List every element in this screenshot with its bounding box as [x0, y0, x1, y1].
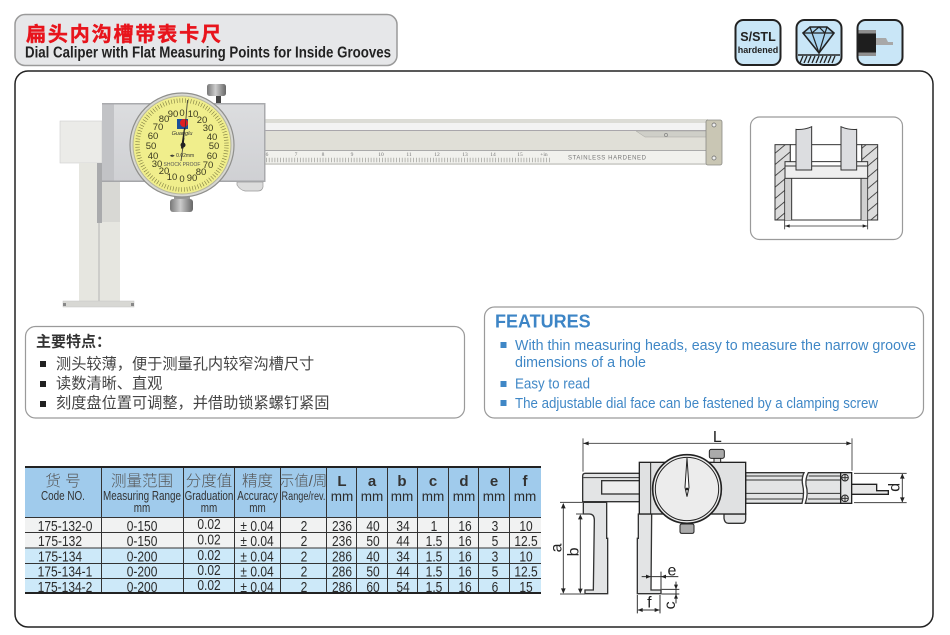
dial: 10	[188, 109, 198, 120]
table rows: ± 0.04	[240, 518, 274, 534]
scale: 14	[490, 152, 496, 158]
table header: Range/rev.	[282, 490, 325, 503]
table rows: 175-134-1	[38, 563, 92, 580]
dimension: e	[642, 563, 678, 590]
table rows: 0.02	[197, 516, 221, 532]
dial: 40	[148, 151, 158, 162]
dial	[130, 93, 234, 197]
table rows: ± 0.04	[240, 533, 274, 549]
dimension: a	[549, 502, 585, 594]
dial: 80	[159, 114, 169, 125]
table header: Measuring Range	[103, 490, 181, 503]
scale: 11	[406, 152, 412, 158]
table header: mm	[249, 502, 266, 515]
dial: SHOCK PROOF	[164, 162, 200, 168]
table rows: 0.02	[197, 531, 221, 548]
drawing: slider head	[639, 462, 746, 514]
title panel: 扁头内沟槽带表卡尺	[26, 23, 221, 46]
dial: 30	[203, 123, 213, 134]
table rows: 1.5	[426, 579, 442, 595]
dimension: f: f	[647, 595, 652, 612]
table header: mm	[391, 489, 413, 504]
table header: Accuracy	[237, 490, 278, 503]
beam	[264, 119, 708, 165]
jaw leg	[63, 163, 134, 307]
dial: 90	[187, 173, 197, 184]
dimension: e: e	[668, 563, 677, 580]
dimension: L	[583, 429, 847, 472]
photo: dial caliper	[60, 84, 722, 307]
table header: f	[522, 473, 528, 490]
title panel: Dial Caliper with Flat Measuring Points for Inside Grooves	[25, 44, 391, 62]
dial: 10	[167, 172, 177, 183]
dial: 60	[148, 131, 158, 142]
table rows: 10	[519, 518, 533, 534]
drawing: beam left	[583, 473, 640, 502]
scale: 13	[462, 152, 468, 158]
table rows: 236	[332, 518, 352, 534]
table rows: 286	[332, 579, 352, 595]
fixed jaw block	[60, 121, 102, 163]
panel: Chinese features: 刻度盘位置可调整，并借助锁紧螺钉紧固	[56, 394, 329, 412]
scale: 6	[266, 152, 269, 158]
table rows: 0-200	[127, 548, 158, 565]
panel: English features: The adjustable dial face can be fastened by a clamping screw	[515, 395, 878, 412]
table rows: 16	[458, 563, 472, 580]
table header: mm	[422, 489, 444, 504]
table rows: 60	[366, 579, 380, 595]
scale: 7	[295, 152, 298, 158]
icon: stainless steel hardened: S/STL	[740, 30, 776, 44]
panel: Chinese features: 测头较薄，便于测量孔内较窄沟槽尺寸	[56, 355, 314, 373]
title panel	[15, 14, 397, 66]
table rows: 3	[492, 548, 498, 565]
table rows: 1	[431, 518, 437, 534]
table header: mm	[453, 489, 475, 504]
drawing: left jaw	[583, 502, 608, 594]
table rows: 0-200	[127, 563, 158, 580]
table rows: 44	[396, 563, 410, 580]
icon: diamond hardness	[796, 20, 842, 65]
dial: 80	[196, 167, 206, 178]
table rows: 12.5	[514, 533, 538, 549]
dial: 30	[152, 159, 162, 170]
table header: mm	[483, 489, 505, 504]
scale: STAINLESS HARDENED	[568, 156, 647, 162]
dial: 50	[146, 141, 156, 152]
table header: Graduation	[185, 490, 233, 503]
scale: +in	[540, 152, 548, 158]
drawing: dial	[653, 455, 721, 523]
panel: Chinese features	[26, 326, 464, 418]
dial: Guanglu	[172, 131, 192, 137]
dial: 70	[203, 160, 213, 171]
table rows: 0-150	[127, 533, 158, 549]
table rows: 40	[366, 548, 380, 565]
table rows: 3	[492, 518, 498, 534]
table rows: 1.5	[426, 533, 442, 549]
table rows: 2	[301, 563, 307, 580]
table: specifications	[25, 466, 541, 595]
table rows: 40	[366, 518, 380, 534]
table rows: 175-134-2	[38, 579, 92, 595]
table rows: 6	[492, 579, 498, 595]
table rows: 50	[366, 533, 380, 549]
table header: Code NO.	[41, 490, 85, 503]
table rows: 2	[301, 548, 307, 565]
dimension: f	[637, 595, 660, 613]
table rows: 16	[458, 518, 472, 534]
table rows	[38, 516, 538, 595]
beam end block	[706, 120, 722, 165]
top clamp knob	[207, 84, 226, 103]
table header: 分度值	[186, 472, 232, 490]
table rows: 12.5	[514, 563, 538, 580]
table header: mm	[331, 489, 353, 504]
table header: d	[459, 473, 469, 490]
table header: 示值/周	[280, 472, 327, 490]
table rows: 15	[519, 579, 533, 595]
table header: a	[368, 473, 377, 490]
table rows: 16	[458, 579, 472, 595]
table header: mm	[134, 502, 150, 515]
drawing: right jaw	[637, 514, 661, 594]
table header: c	[429, 473, 437, 490]
table rows: 2	[301, 518, 307, 534]
bottom knob	[170, 196, 193, 212]
drawing: tab	[724, 514, 746, 523]
table rows: 0.02	[197, 577, 221, 593]
table header	[41, 472, 536, 515]
panel: Chinese features: 读数清晰、直观	[56, 376, 162, 392]
table rows: 0.02	[197, 562, 221, 578]
inset: groove measuring illustration	[750, 117, 902, 240]
table rows: 50	[366, 563, 380, 580]
panel: English features	[484, 307, 924, 418]
table rows: ± 0.04	[240, 548, 274, 565]
dial: 0	[179, 174, 185, 185]
table rows: 34	[396, 518, 410, 534]
table rows: 286	[332, 563, 352, 580]
table rows: 175-132-0	[38, 518, 93, 534]
slider tab	[237, 182, 263, 191]
dial: 40	[207, 132, 217, 143]
dial: 20	[197, 115, 207, 126]
drawing: knobs	[680, 449, 724, 533]
table rows: 175-134	[38, 548, 82, 565]
dial: 50	[209, 141, 219, 152]
table header: b	[397, 473, 407, 490]
panel: Chinese features: 主要特点：	[36, 332, 111, 350]
icon: flat measuring point	[858, 20, 902, 65]
technical drawing with dimensions	[549, 429, 907, 613]
table rows: 16	[458, 533, 472, 549]
table header: mm	[201, 502, 217, 515]
table rows: 10	[519, 548, 533, 565]
dimension: b: b	[565, 547, 582, 556]
table rows: 34	[396, 548, 410, 565]
scale	[266, 152, 647, 162]
scale: 8	[322, 152, 325, 158]
dial: ◂▸ 0.02mm	[170, 153, 194, 159]
dimension: a: a	[549, 543, 566, 552]
table rows: 2	[301, 579, 307, 595]
icon: stainless steel hardened: hardened	[738, 45, 778, 55]
table rows: 5	[492, 563, 498, 580]
panel: English features: Easy to read	[515, 376, 590, 392]
table header: 精度	[242, 472, 273, 490]
scale: 10	[378, 152, 384, 158]
dimension: c	[662, 582, 679, 609]
table header: L	[337, 473, 347, 490]
table rows: 236	[332, 533, 352, 549]
table rows: 286	[332, 548, 352, 565]
table rows: ± 0.04	[240, 563, 274, 580]
table header: 测量范围	[111, 472, 173, 490]
dimension: b	[565, 514, 583, 594]
dial: 60	[207, 151, 217, 162]
table rows: 175-132	[38, 533, 82, 549]
table rows: ± 0.04	[240, 579, 274, 595]
panel: English features: FEATURES	[495, 312, 591, 332]
scale: 15	[517, 152, 523, 158]
icon: stainless steel hardened	[736, 20, 780, 65]
dimension: L: L	[713, 429, 722, 446]
dial: 70	[153, 122, 163, 133]
dial: 20	[159, 166, 169, 177]
table header: 货 号	[45, 472, 81, 490]
panel: English features: dimensions of a hole	[515, 354, 646, 371]
scale: 9	[351, 152, 354, 158]
table rows: 1.5	[426, 563, 442, 580]
table rows: 0.02	[197, 547, 221, 563]
dial: 0	[179, 108, 185, 119]
table header: mm	[361, 489, 383, 504]
table rows: 16	[458, 548, 472, 565]
table rows: 54	[396, 579, 410, 595]
table header: mm	[514, 489, 536, 504]
scale: 12	[434, 152, 440, 158]
table rows: 5	[492, 533, 498, 549]
table header: e	[490, 473, 498, 490]
table rows: 0-200	[127, 579, 158, 595]
slider head	[102, 103, 266, 182]
dial logo	[177, 119, 188, 129]
table rows: 44	[396, 533, 410, 549]
dimension: c: c	[662, 601, 679, 609]
table rows: 0-150	[127, 518, 158, 534]
table rows: 1.5	[426, 548, 442, 565]
table rows: 2	[301, 533, 307, 549]
dial: 90	[168, 109, 178, 120]
drawing: beam right and end block	[746, 438, 907, 503]
panel: English features: With thin measuring heads, easy to measure the narrow groove	[515, 337, 916, 354]
drawing: beam right and end block: d	[886, 483, 903, 492]
